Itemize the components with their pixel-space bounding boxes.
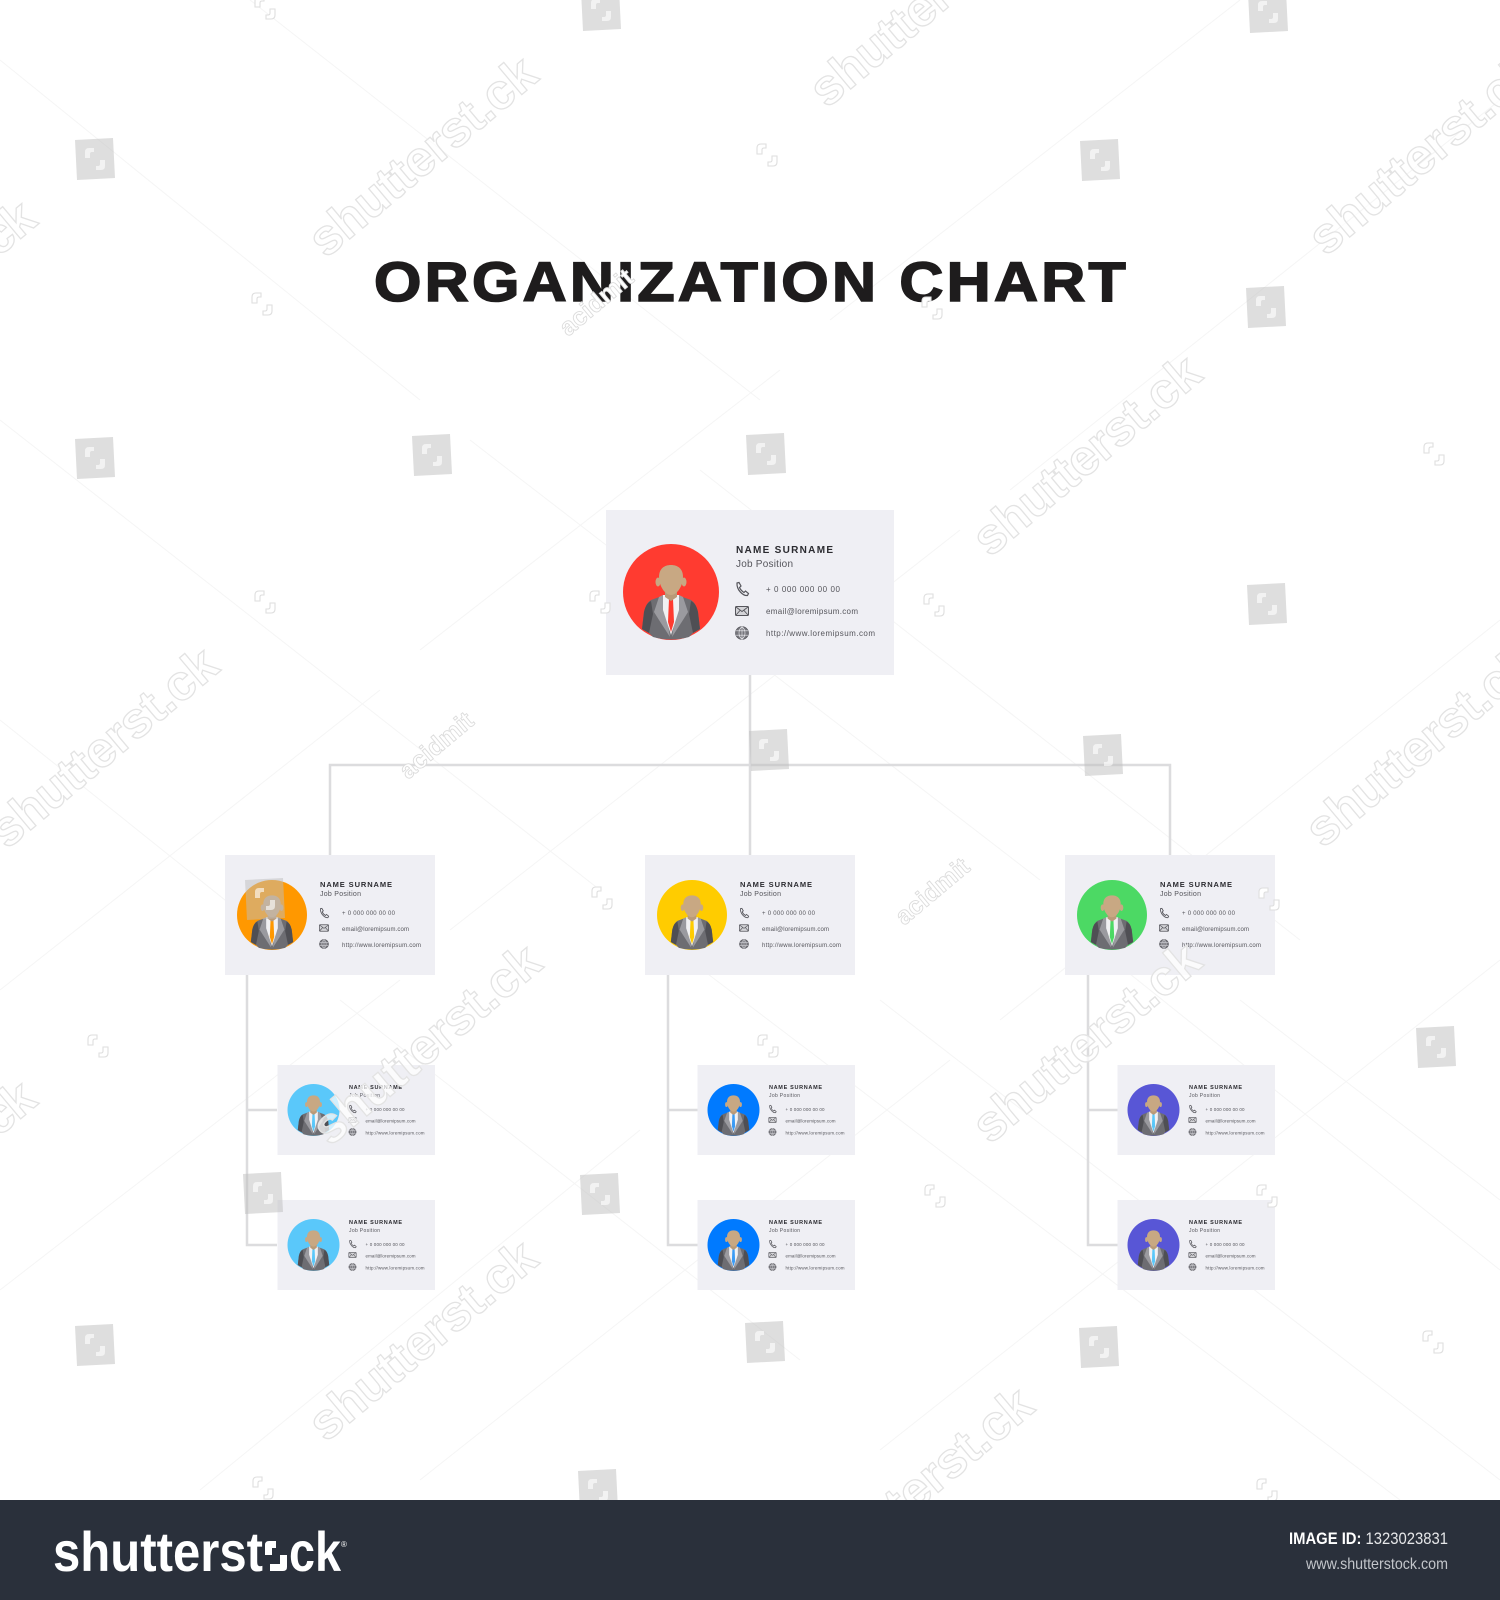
card: manager yellow (645, 855, 855, 975)
image id: IMAGE ID: 1323023831 (1289, 1529, 1448, 1548)
icon: globe (319, 939, 329, 949)
avatar: light blue (288, 1084, 340, 1136)
name: NAME SURNAME (740, 880, 812, 889)
job position: Job Position (769, 1228, 800, 1234)
website: http://www.loremipsum.com (366, 1266, 425, 1270)
card: staff blue 2 (698, 1200, 855, 1290)
icon: phone (350, 1240, 356, 1248)
avatar: blue (708, 1219, 760, 1271)
icon: phone (770, 1105, 776, 1113)
icon: globe (349, 1263, 356, 1271)
icon: phone (1160, 908, 1169, 918)
card: staff light blue 2 (278, 1200, 435, 1290)
email: email@loremipsum.com (762, 927, 829, 933)
phone number: + 0 000 000 00 00 (366, 1242, 405, 1247)
avatar: orange (237, 880, 307, 950)
email: email@loremipsum.com (1182, 927, 1249, 933)
website: http://www.loremipsum.com (766, 629, 875, 638)
email: email@loremipsum.com (766, 607, 858, 616)
card: staff purple 2 (1118, 1200, 1275, 1290)
job position: Job Position (769, 1093, 800, 1099)
icon: globe (769, 1128, 776, 1136)
job position: Job Position (736, 559, 793, 570)
watermark text: acidmit: acidmit (394, 706, 480, 785)
watermark text: shutterstock: shutterst.ck (301, 932, 552, 1155)
registered mark: ® (341, 1540, 347, 1549)
phone number: + 0 000 000 00 00 (786, 1107, 825, 1112)
email: email@loremipsum.com (366, 1254, 416, 1258)
website: http://www.loremipsum.com (1182, 943, 1261, 949)
watermark text: shutterstock: shutterst.ck (297, 44, 548, 267)
name: NAME SURNAME (1160, 880, 1232, 889)
email: email@loremipsum.com (786, 1118, 836, 1124)
watermark text: acidmit (394, 263, 976, 931)
job position: Job Position (1189, 1228, 1220, 1234)
shutterstock logo: ck (289, 1520, 342, 1583)
email: email@loremipsum.com (366, 1118, 416, 1124)
icon: globe (1189, 1128, 1196, 1136)
avatar: red (623, 544, 719, 640)
icon: mail (319, 925, 329, 931)
website: http://www.loremipsum.com (762, 943, 841, 949)
email: email@loremipsum.com (342, 927, 409, 933)
icon: globe (739, 939, 749, 949)
watermark text: acidmit: acidmit (554, 263, 640, 342)
icon: mail (769, 1117, 776, 1123)
name: NAME SURNAME (320, 880, 392, 889)
card: top executive (606, 510, 894, 675)
icon: mail (349, 1117, 356, 1123)
watermark text: shutterstock: shutterst.ck (793, 1375, 1044, 1598)
website: http://www.loremipsum.com (1206, 1266, 1265, 1270)
phone number: + 0 000 000 00 00 (1206, 1242, 1245, 1247)
icon: phone (1190, 1105, 1196, 1113)
card: staff purple 1 (1118, 1065, 1275, 1155)
phone number: + 0 000 000 00 00 (1206, 1107, 1245, 1112)
icon: mail (349, 1252, 356, 1258)
footer bar (0, 1500, 1500, 1600)
phone number: + 0 000 000 00 00 (766, 585, 841, 594)
website: http://www.loremipsum.com (1206, 1130, 1265, 1136)
job position: Job Position (1160, 891, 1201, 898)
job position: Job Position (740, 891, 781, 898)
card: staff light blue 1 (278, 1065, 435, 1155)
phone number: + 0 000 000 00 00 (1182, 911, 1236, 917)
name: NAME SURNAME (349, 1085, 402, 1091)
icon: globe (769, 1263, 776, 1271)
card: manager orange (225, 855, 435, 975)
icon: phone (740, 908, 749, 918)
shutterstock logo: shutterst (53, 1520, 263, 1583)
email: email@loremipsum.com (786, 1254, 836, 1258)
watermark text: shutterstock: shutterst.ck (961, 343, 1212, 566)
phone number: + 0 000 000 00 00 (342, 911, 396, 917)
phone number: + 0 000 000 00 00 (786, 1242, 825, 1247)
icon: mail (1159, 925, 1169, 931)
phone number: + 0 000 000 00 00 (366, 1107, 405, 1112)
title: ORGANIZATION CHART (374, 250, 1129, 313)
watermark text: acidmit: acidmit (890, 852, 976, 931)
job position: Job Position (349, 1228, 380, 1234)
avatar: green (1077, 880, 1147, 950)
icon: mail (1189, 1117, 1196, 1123)
icon: mail (739, 925, 749, 931)
icon: phone (320, 908, 329, 918)
connector lines (247, 675, 1170, 1245)
watermark text: shutterstock: shutterst.ck (297, 1228, 548, 1451)
email: email@loremipsum.com (1206, 1118, 1256, 1124)
website: http://www.loremipsum.com (786, 1130, 845, 1136)
name: NAME SURNAME (736, 545, 833, 556)
icon: phone (350, 1105, 356, 1113)
avatar: yellow (657, 880, 727, 950)
name: NAME SURNAME (769, 1085, 822, 1091)
website url: www.shutterstock.com (1305, 1556, 1448, 1573)
avatar: light blue (288, 1219, 340, 1271)
icon: mail (1189, 1252, 1196, 1258)
email: email@loremipsum.com (1206, 1254, 1256, 1258)
avatar: purple (1128, 1084, 1180, 1136)
icon: phone (770, 1240, 776, 1248)
phone number: + 0 000 000 00 00 (762, 911, 816, 917)
website: http://www.loremipsum.com (366, 1130, 425, 1136)
website: http://www.loremipsum.com (786, 1266, 845, 1270)
icon: phone (1190, 1240, 1196, 1248)
card: staff blue 1 (698, 1065, 855, 1155)
job position: Job Position (349, 1093, 380, 1099)
icon: globe (349, 1128, 356, 1136)
icon: globe (1159, 939, 1169, 949)
icon: mail (769, 1252, 776, 1258)
watermark text: shutterstock: shutterst.ck (961, 930, 1212, 1153)
name: NAME SURNAME (1189, 1220, 1242, 1226)
name: NAME SURNAME (1189, 1085, 1242, 1091)
website: http://www.loremipsum.com (342, 943, 421, 949)
job position: Job Position (320, 891, 361, 898)
name: NAME SURNAME (349, 1220, 402, 1226)
job position: Job Position (1189, 1093, 1220, 1099)
card: manager green (1065, 855, 1275, 975)
icon: mail (736, 606, 748, 616)
icon: globe (1189, 1263, 1196, 1271)
icon: phone (737, 582, 748, 596)
icon: globe (736, 627, 748, 639)
avatar: purple (1128, 1219, 1180, 1271)
avatar: blue (708, 1084, 760, 1136)
name: NAME SURNAME (769, 1220, 822, 1226)
